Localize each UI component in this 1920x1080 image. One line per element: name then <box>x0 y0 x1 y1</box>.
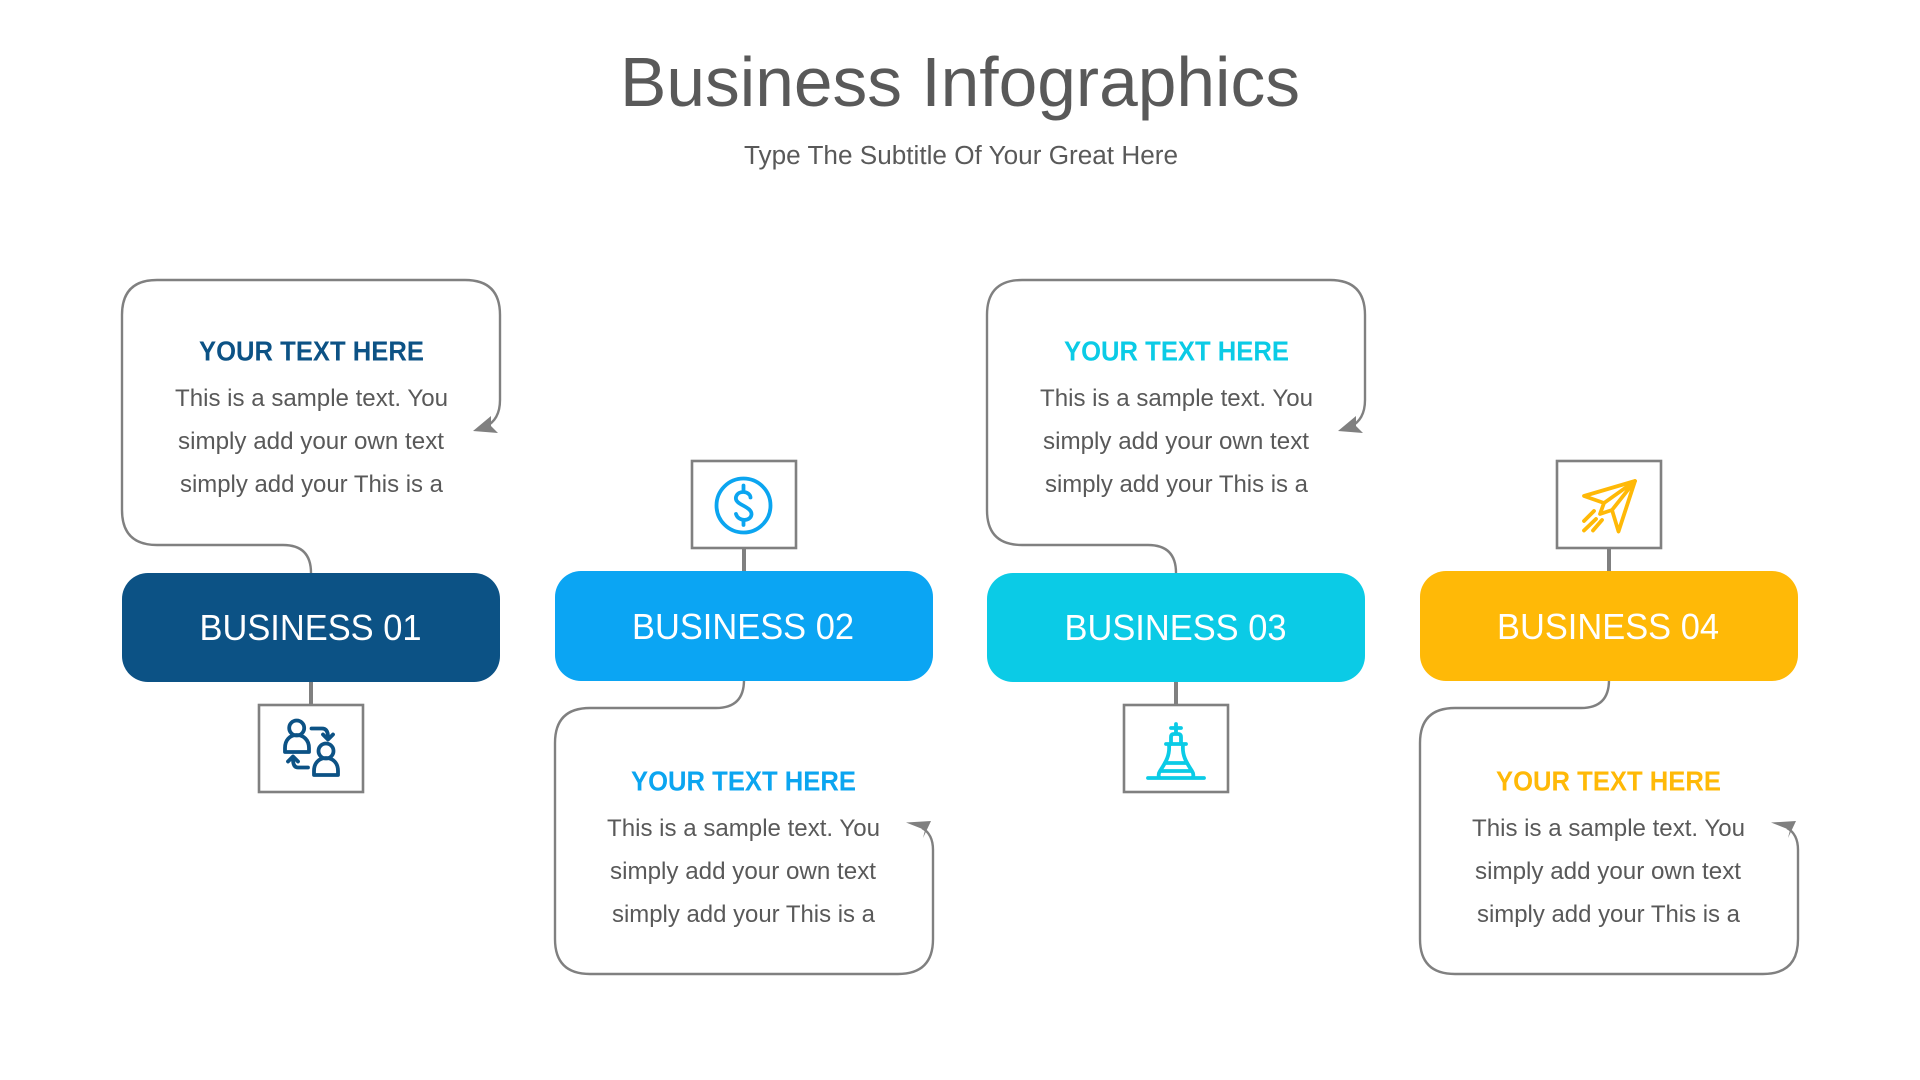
connector to icon <box>309 682 313 705</box>
callout text: simply add your own text <box>610 858 876 885</box>
callout text: YOUR TEXT HERE <box>1496 766 1721 796</box>
callout text: YOUR TEXT HERE <box>1064 336 1289 366</box>
callout text: simply add your This is a <box>1045 471 1309 498</box>
button: business 02 <box>555 571 933 681</box>
icon: dollar coin <box>716 478 770 532</box>
icon box <box>1557 461 1661 548</box>
connector to icon <box>1607 548 1611 571</box>
icon: people exchange <box>285 720 338 775</box>
callout text: simply add your This is a <box>180 471 444 498</box>
button: business 02: BUSINESS 02 <box>632 606 854 647</box>
callout text: This is a sample text. You <box>1040 385 1313 412</box>
connector to icon <box>742 548 746 571</box>
callout text: This is a sample text. You <box>1472 815 1745 842</box>
callout outline with arrow <box>555 680 933 974</box>
callout text <box>607 766 880 928</box>
icon: chess king <box>1148 724 1204 778</box>
callout text <box>175 336 448 498</box>
callout text: simply add your This is a <box>1477 901 1741 928</box>
callout text: This is a sample text. You <box>175 385 448 412</box>
callout text: simply add your This is a <box>612 901 876 928</box>
connector to icon <box>1174 682 1178 705</box>
icon: paper plane <box>1584 481 1635 532</box>
panel: business 04 <box>1420 461 1798 974</box>
icon box <box>259 705 363 792</box>
callout outline with arrow <box>122 280 500 574</box>
callout text <box>1040 336 1313 498</box>
button: business 01 <box>122 573 500 682</box>
panel: business 01 <box>122 280 500 792</box>
callout text: simply add your own text <box>1475 858 1741 885</box>
callout text: YOUR TEXT HERE <box>631 766 856 796</box>
button: business 04 <box>1420 571 1798 681</box>
panel: business 02 <box>555 461 933 974</box>
button: business 03: BUSINESS 03 <box>1064 607 1286 648</box>
callout text: simply add your own text <box>178 428 444 455</box>
callout text: This is a sample text. You <box>607 815 880 842</box>
subtitle: Type The Subtitle Of Your Great Here <box>744 142 1178 170</box>
icon box <box>692 461 796 548</box>
panel: business 03 <box>987 280 1365 792</box>
callout text: YOUR TEXT HERE <box>199 336 424 366</box>
title: Business Infographics <box>620 43 1300 121</box>
callout text <box>1472 766 1745 928</box>
button: business 04: BUSINESS 04 <box>1497 606 1719 647</box>
icon box <box>1124 705 1228 792</box>
button: business 01: BUSINESS 01 <box>200 607 422 648</box>
callout outline with arrow <box>987 280 1365 574</box>
callout text: simply add your own text <box>1043 428 1309 455</box>
button: business 03 <box>987 573 1365 682</box>
callout outline with arrow <box>1420 680 1798 974</box>
